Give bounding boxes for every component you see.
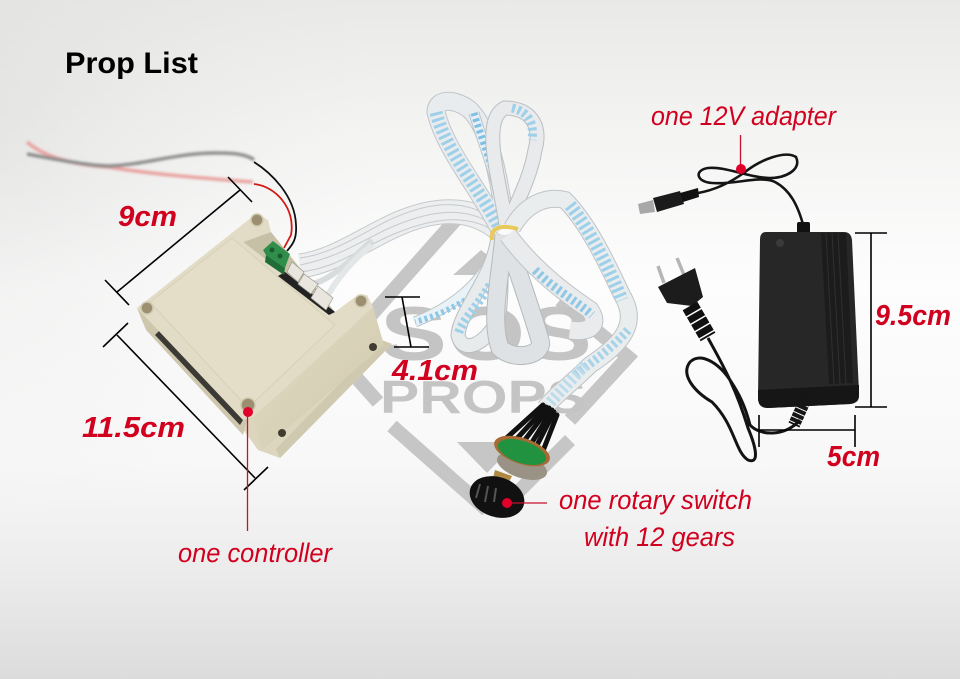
knob — [464, 469, 530, 525]
callout: controller pointer — [243, 407, 253, 531]
green disc — [490, 430, 554, 472]
callout: switch pointer — [502, 498, 547, 508]
dimension line: 5cm — [759, 415, 855, 447]
plug prongs — [658, 258, 684, 283]
mains cable — [687, 338, 800, 461]
plug head — [658, 268, 703, 306]
lid line — [150, 238, 335, 408]
dimension line: 9.5cm — [855, 233, 887, 407]
ribbon: top middle strip — [474, 113, 506, 222]
label: 5cm: 5cm — [827, 441, 880, 473]
led — [776, 239, 784, 247]
plug strain relief — [690, 306, 708, 337]
callout: adapter pointer — [736, 135, 746, 174]
title: Prop List — [65, 47, 198, 80]
rotary switch — [464, 405, 557, 525]
label: one controller: one controller — [178, 538, 333, 568]
dimension line: 11.5cm — [103, 323, 268, 490]
watermark logo: PROPS — [380, 371, 586, 423]
label: one rotary switch with 12 gears: with 12 gears — [584, 522, 735, 552]
ridges — [821, 233, 853, 384]
ribbon: top left loop — [436, 101, 505, 230]
shaft — [492, 470, 512, 488]
blurred power wires — [27, 142, 254, 182]
flange screw holes — [278, 343, 377, 437]
dimension line: 9cm — [105, 177, 252, 305]
black wires — [502, 405, 557, 456]
lower side edge — [137, 308, 247, 435]
dc cable — [698, 155, 804, 228]
watermark logo: SOS — [380, 292, 592, 377]
circuit board connectors — [278, 272, 335, 315]
green terminal block — [263, 241, 290, 275]
ribbon: lower left tail — [415, 235, 497, 322]
label: 11.5cm: 11.5cm — [82, 412, 185, 444]
dc jack — [638, 188, 699, 214]
din rail flange — [240, 333, 392, 458]
top face — [137, 213, 373, 420]
ribbon cables — [300, 101, 629, 408]
ribbon: top right loop — [493, 108, 537, 225]
mounting holes — [141, 214, 367, 412]
ribbon: controller to knot — [300, 205, 500, 300]
controller box — [137, 213, 392, 458]
watermark logo — [334, 208, 628, 510]
controller wires — [254, 162, 296, 251]
ribbon: right loop to switch — [512, 199, 629, 408]
adapter body — [758, 232, 859, 408]
label: one rotary switch with 12 gears — [559, 485, 752, 552]
label: 9.5cm: 9.5cm — [875, 300, 951, 332]
adapter — [638, 155, 859, 461]
ribbon: lower loops — [458, 235, 594, 356]
label: 9cm: 9cm — [118, 201, 177, 233]
switch body — [494, 447, 550, 485]
cable strain relief — [794, 396, 807, 425]
dimension line: 4.1cm — [385, 297, 429, 347]
label: one rotary switch with 12 gears: one rotary switch — [559, 485, 752, 515]
adapter cable strain relief — [797, 222, 810, 234]
yellow rubber band — [492, 227, 518, 240]
label: one 12V adapter: one 12V adapter — [651, 101, 837, 131]
label: 4.1cm: 4.1cm — [391, 355, 478, 387]
right side face — [253, 307, 384, 450]
